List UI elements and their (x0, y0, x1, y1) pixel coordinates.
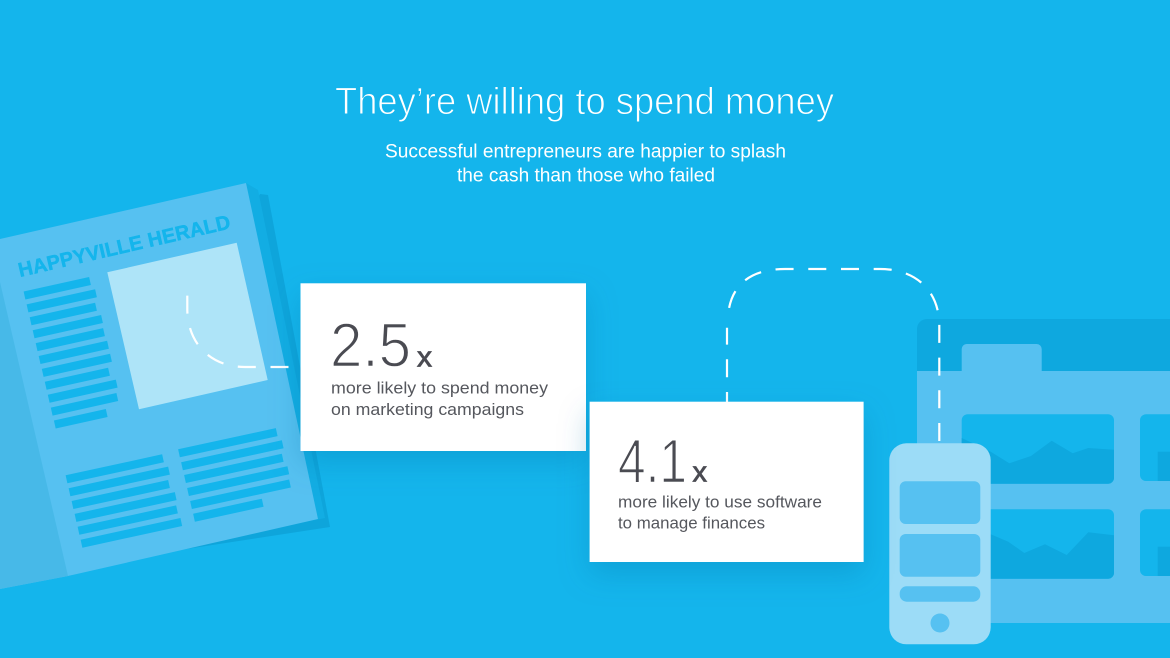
stat description (331, 379, 549, 419)
subtitle: Successful entrepreneurs are happier to splash (385, 142, 786, 162)
stat description: more likely to spend money (331, 379, 549, 397)
chart panel: top (962, 414, 1114, 484)
stat number 4.1x: 4.1 (618, 428, 687, 497)
newspaper text column: left (24, 281, 117, 424)
newspaper photo (107, 243, 268, 409)
stat description: more likely to use software (618, 493, 822, 511)
card: marketing stat (300, 283, 586, 451)
stat description: on marketing campaigns (331, 401, 524, 419)
title: They’re willing to spend money (335, 81, 834, 123)
illustration: dashboard (917, 319, 1170, 623)
subtitle: the cash than those who failed (457, 166, 715, 187)
chart panel: bottom (962, 509, 1114, 579)
chart panel: right top (1140, 414, 1170, 481)
newspaper masthead: HAPPYVILLE HERALD (16, 212, 233, 282)
stat number 4.1x: x (692, 456, 708, 488)
illustration: newspaper (0, 183, 330, 589)
dashed connector: newspaper to card (187, 293, 288, 367)
dashed connector: card to phone (727, 269, 939, 441)
card: software stat (590, 402, 864, 562)
stat number 2.5x: x (417, 342, 433, 374)
stat description: to manage finances (618, 514, 765, 532)
newspaper text column: bottom left (66, 458, 181, 544)
stat number 2.5x: 2.5 (330, 312, 411, 381)
dashboard tab (962, 344, 1042, 371)
chart panel: right bottom (1140, 509, 1170, 576)
newspaper text column: bottom right (179, 432, 290, 518)
subtitle (385, 142, 786, 187)
stat description (618, 493, 822, 532)
illustration: phone (889, 443, 991, 644)
